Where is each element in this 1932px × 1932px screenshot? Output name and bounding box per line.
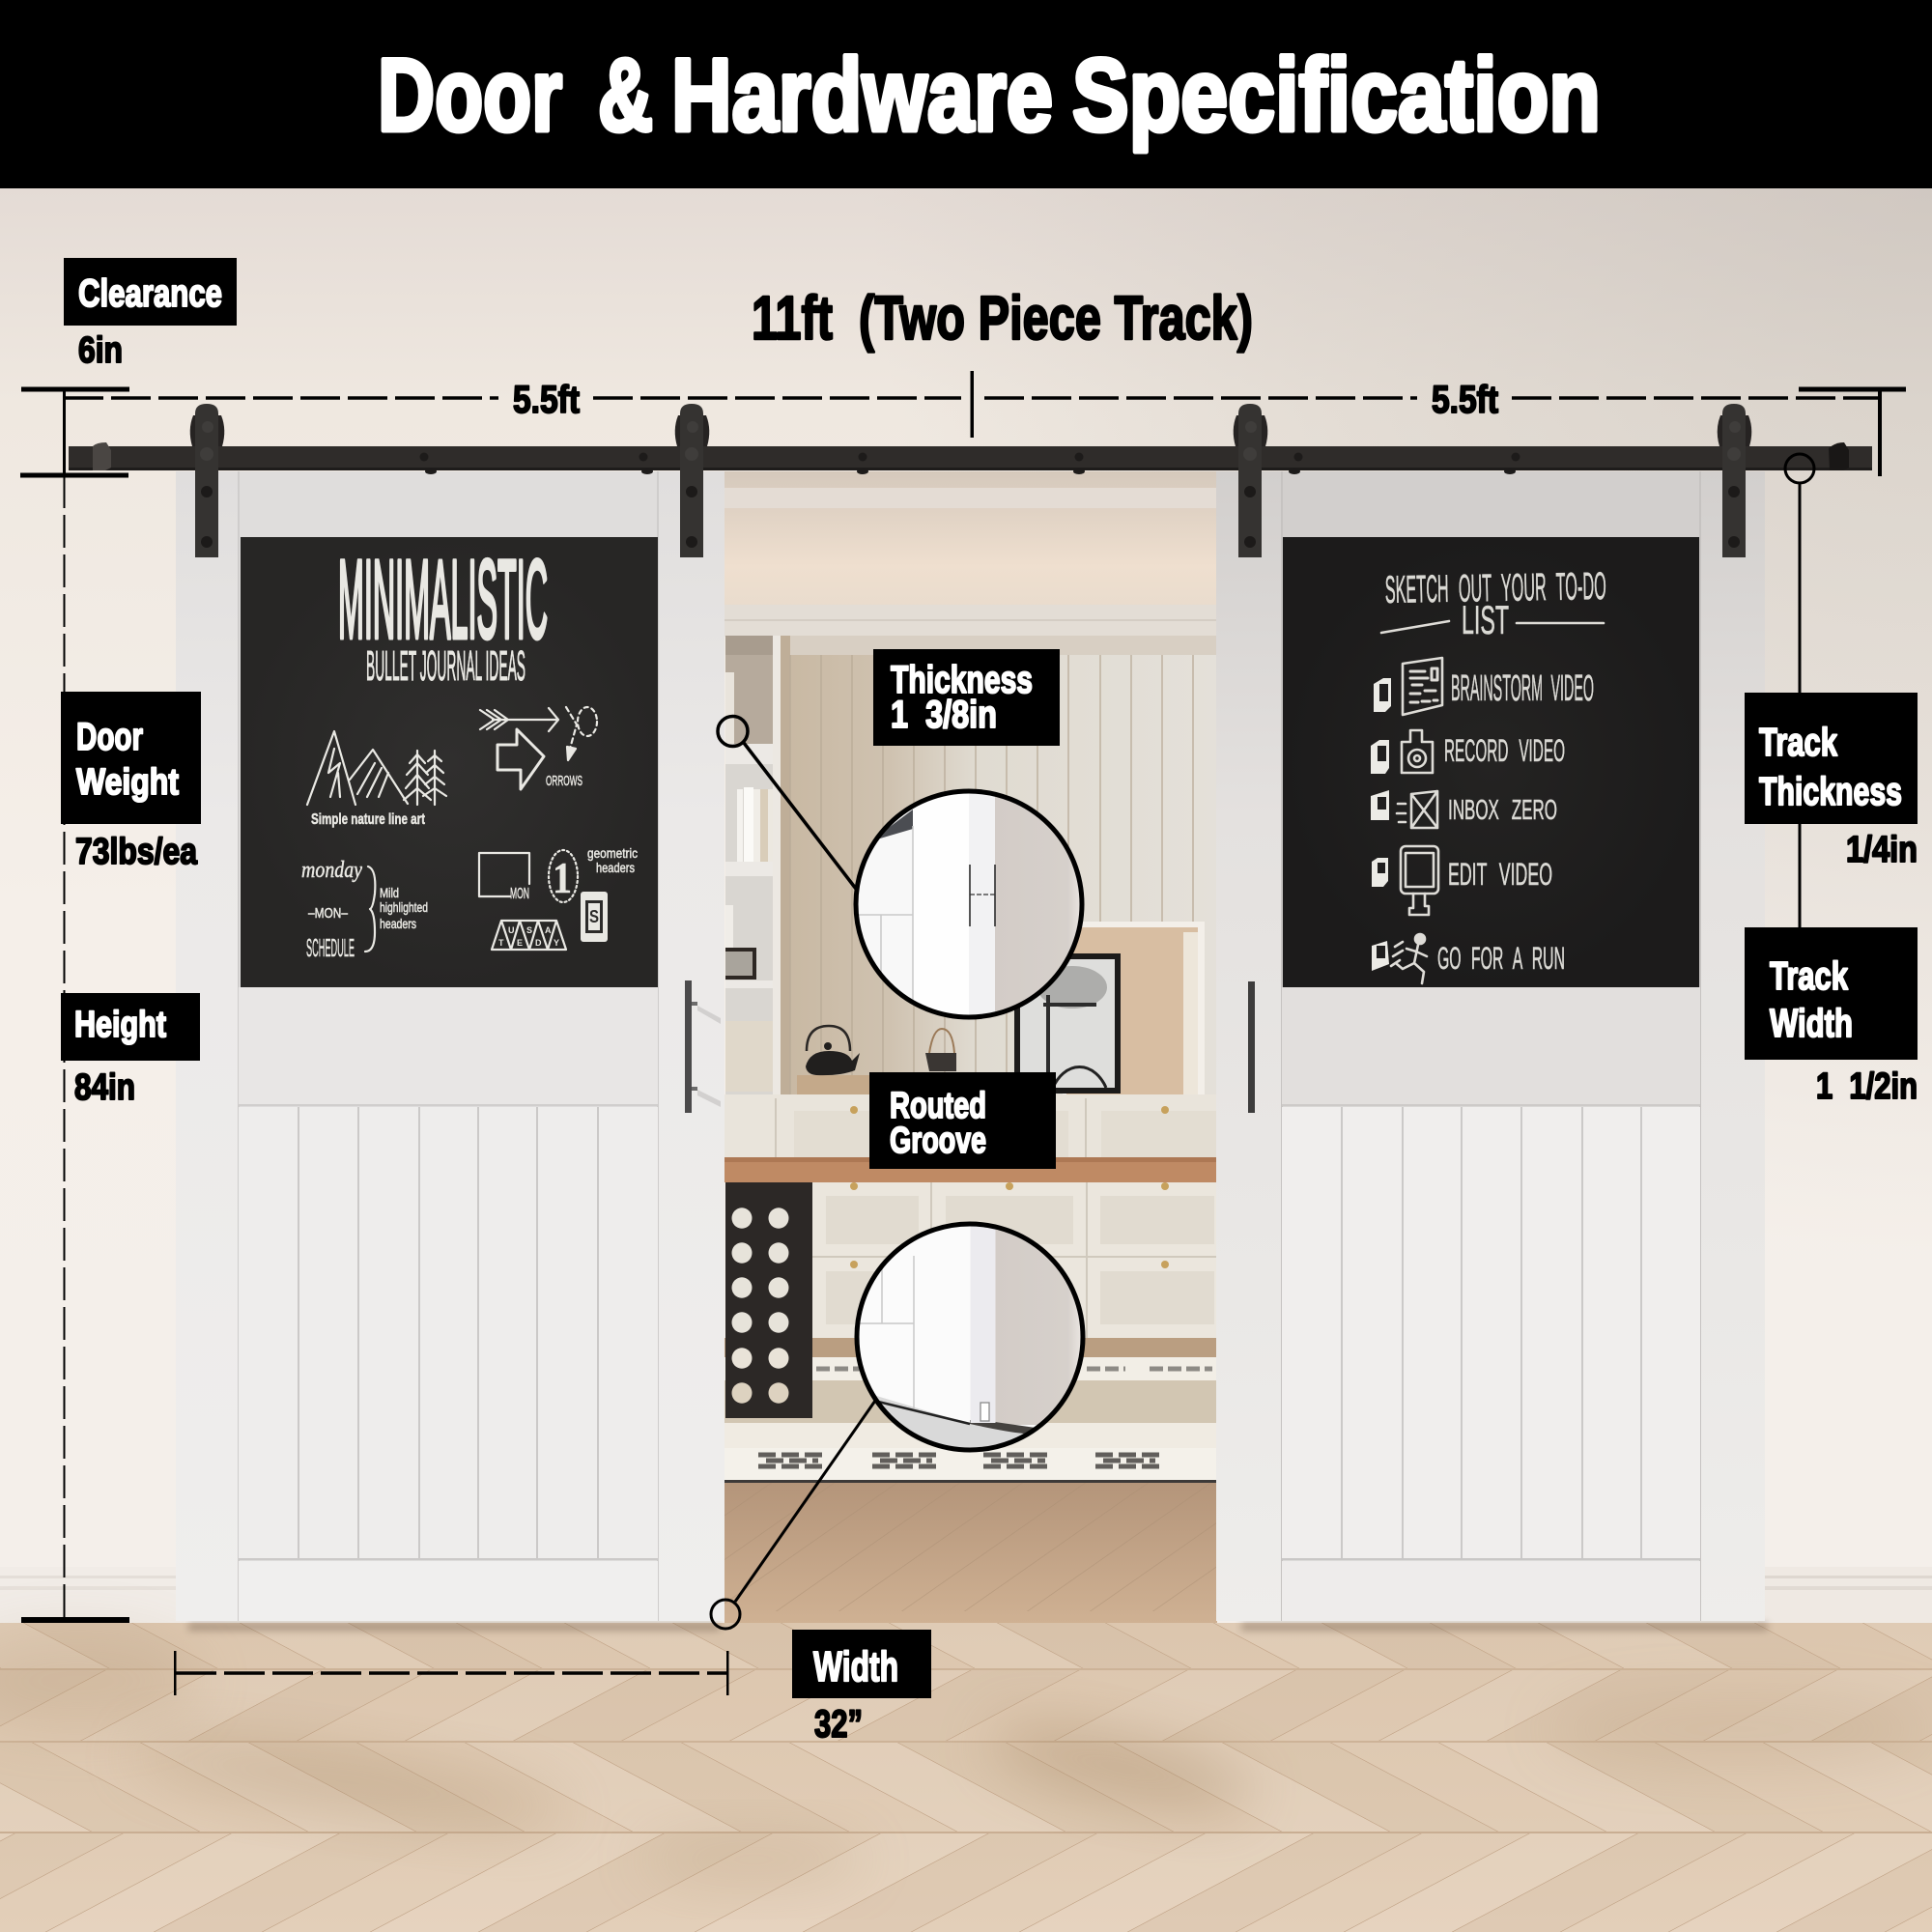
herringbone wood floor (0, 1623, 1932, 1932)
track with hangers (69, 404, 1872, 557)
teapot on tray (797, 1026, 869, 1094)
room floor and rug (724, 1338, 1217, 1623)
callout: clearance (64, 258, 237, 371)
chalkboard: minimalistic bullet journal ideas: –MON– (308, 905, 349, 922)
dimension: track width 5.5ft + 5.5ft (64, 371, 1880, 438)
chalkboard: to-do list: SKETCH OUT YOUR TO-DO (1384, 565, 1606, 611)
chalkboard: to-do list: INBOX ZERO (1448, 795, 1557, 826)
hanger 3 (1234, 404, 1267, 557)
callout: width (792, 1630, 931, 1746)
callout: track thickness: Track (1759, 720, 1837, 764)
dimension: clearance right (1799, 386, 1906, 476)
hanger 4 (1718, 404, 1751, 557)
title bar: Specification (1072, 37, 1601, 153)
chalkboard: minimalistic bullet journal ideas: headers (380, 916, 416, 931)
icon: track stop right (1829, 442, 1849, 470)
icon: geometric headers: U (508, 925, 514, 935)
books (737, 789, 743, 862)
icon: monitor (1401, 846, 1438, 915)
magnifier: door bottom groove (854, 1222, 1086, 1454)
radio (725, 948, 756, 980)
callout: track width: Width (1770, 1001, 1853, 1045)
label: Thickness (891, 659, 1033, 701)
callout: width: 32” (814, 1703, 863, 1746)
callout: routed groove magnifier (711, 1072, 1086, 1629)
leader line (711, 1401, 875, 1629)
chalkboard: minimalistic bullet journal ideas (241, 537, 658, 987)
chalkboard: to-do list: RECORD VIDEO (1444, 733, 1565, 768)
leader line (718, 717, 856, 889)
label: 1 3/8in (891, 694, 997, 736)
chalkboard: minimalistic bullet journal ideas: BULLET JOURNAL IDEAS (366, 642, 526, 690)
callout: track thickness: 1/4in (1846, 830, 1918, 870)
icon: geometric headers (479, 845, 638, 950)
chalkboard: minimalistic bullet journal ideas: ORROWS (546, 773, 582, 789)
chalkboard: to-do list (1283, 537, 1699, 987)
callout: height (61, 993, 200, 1108)
chalkboard: minimalistic bullet journal ideas: SCHEDULE (306, 933, 355, 962)
ceiling (724, 471, 1217, 607)
icon: geometric headers: S (589, 907, 599, 926)
icon: camera (1402, 730, 1433, 773)
chalkboard: to-do list: EDIT VIDEO (1448, 857, 1552, 892)
label: Groove (890, 1121, 986, 1161)
callout: thickness magnifier (718, 649, 1086, 1021)
crown molding (724, 605, 1217, 637)
track spacers (419, 452, 1520, 474)
icon: mountains and trees (307, 731, 446, 805)
icon: runner (1391, 934, 1427, 983)
callout: clearance: Clearance (78, 272, 222, 315)
callout: door weight: 73lbs/ea (75, 832, 198, 872)
icon: track stop left (93, 442, 111, 470)
wall background (0, 188, 1932, 1628)
checkboxes (1371, 678, 1391, 971)
hanger 1 (190, 404, 224, 557)
dimension: clearance and height left (20, 386, 129, 1623)
title bar (0, 0, 1932, 188)
callout: clearance: 6in (78, 330, 123, 371)
title bar: Door (378, 37, 562, 153)
icon: geometric headers: S (526, 925, 532, 935)
chalkboard: minimalistic bullet journal ideas: monday (301, 858, 362, 883)
icon: geometric headers: geometric (587, 845, 638, 861)
room seen through the doorway (724, 471, 1217, 1623)
chalkboard: minimalistic bullet journal ideas: Mild (380, 885, 399, 900)
door handle (1248, 981, 1255, 1113)
icon: geometric headers: A (545, 925, 552, 935)
chalkboard: to-do list: LIST (1462, 597, 1509, 642)
callout: door weight (61, 692, 201, 872)
callout: height: Height (74, 1005, 166, 1045)
label (869, 1072, 1056, 1169)
framed bicycle photo (1014, 953, 1121, 1094)
wooden counter (724, 1157, 1217, 1182)
title bar: Hardware (671, 37, 1053, 153)
callout: door weight: Weight (76, 762, 179, 803)
callout: door weight: Door (76, 716, 143, 758)
callout: width: Width (813, 1643, 898, 1690)
label (873, 649, 1060, 746)
icon: envelope (1397, 791, 1437, 828)
icon: geometric headers: Y (554, 938, 559, 948)
panel: right door (1216, 471, 1765, 1621)
door handle (685, 980, 721, 1113)
track length heading: 11ft (Two Piece Track) (752, 283, 1253, 353)
panelled back wall (781, 636, 1217, 1099)
small kettle (925, 1029, 956, 1071)
panel: left door (176, 471, 724, 1621)
icon: geometric headers: 1 (553, 853, 572, 902)
callout: track width (1745, 927, 1918, 1107)
leader: track marker (1785, 454, 1814, 927)
chalkboard: minimalistic bullet journal ideas: highlighted (380, 899, 428, 915)
shelving (725, 636, 781, 1099)
leaning art board (1063, 922, 1205, 1094)
icon: geometric headers: MON (510, 886, 529, 902)
panel: left door: MINIMALISTIC (338, 538, 548, 662)
dimension: track width 5.5ft + 5.5ft: 5.5ft (513, 379, 580, 421)
icon: geometric headers: headers (596, 860, 635, 875)
upper cabinets (724, 1094, 1217, 1157)
lower cabinets (812, 1182, 1217, 1339)
icon: brainstorm board (1403, 658, 1442, 715)
chalkboard: to-do list: GO FOR A RUN (1437, 941, 1565, 976)
label: Routed (890, 1086, 986, 1126)
callout: track thickness (1745, 693, 1918, 870)
chalkboard: minimalistic bullet journal ideas: Simple nature line art (311, 811, 425, 828)
callout: height: 84in (74, 1067, 135, 1108)
title bar: & (598, 37, 653, 153)
baseboards (0, 1567, 1932, 1623)
hanger 2 (675, 404, 709, 557)
icon: geometric headers: D (535, 938, 542, 948)
icon: geometric headers: T (498, 938, 504, 948)
callout: track width: Track (1770, 953, 1848, 998)
chalkboard: to-do list: BRAINSTORM VIDEO (1451, 668, 1594, 709)
icon: arrows (480, 707, 597, 789)
large book (725, 1021, 773, 1092)
magnifier: door edge thickness (854, 789, 1086, 1021)
icon: geometric headers: E (517, 938, 523, 948)
dimension: track width 5.5ft + 5.5ft: 5.5ft (1432, 379, 1498, 421)
dimension: door width (174, 1651, 728, 1695)
perforated black desk panel (725, 1182, 812, 1418)
